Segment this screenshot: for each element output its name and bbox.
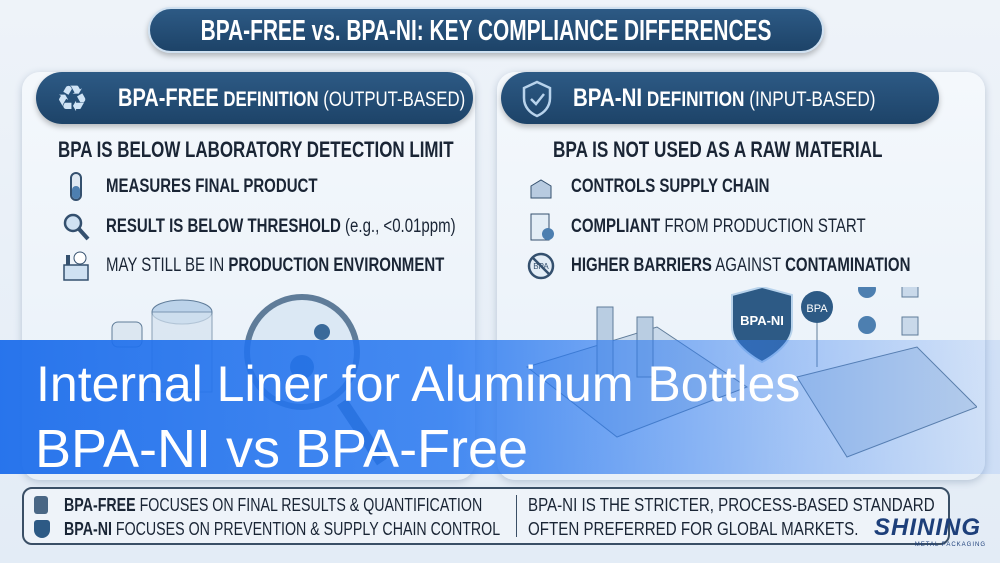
subheading: BPA IS BELOW LABORATORY DETECTION LIMIT [58,137,454,162]
panel: BPA-NI: BPA [533,262,549,271]
panel: BPA-NI: HIGHER BARRIERS AGAINST CONTAMINATION [571,255,910,276]
summary left: BPA-NI FOCUSES ON PREVENTION & SUPPLY CHAIN CONTROL [64,519,500,539]
list item 1 [70,172,318,201]
panel: BPA-NI [497,72,985,480]
list item 2 [530,214,866,240]
icon: recycle: ♻ [56,78,88,119]
panel: BPA-FREE: MAY STILL BE IN PRODUCTION ENVIRONMENT [106,255,444,276]
banner overlay [0,340,1000,474]
illustration: plant, shield, flow [526,287,977,458]
list item 2 [64,214,456,240]
illustration: plant, shield, flow: BPA [806,303,828,315]
banner title line 2: BPA-NI vs BPA-Free [35,419,528,479]
header: BPA-NI definition: BPA-NI DEFINITION (INPUT-BASED) [573,84,876,112]
illustration: plant, shield, flow: BPA-NI [740,313,784,328]
panel: BPA-FREE: MEASURES FINAL PRODUCT [106,176,318,197]
list item 3 [528,252,910,280]
illustration: lab containers and magnifier [112,294,387,466]
icon: shield check [522,80,552,118]
banner title line 1: Internal Liner for Aluminum Bottles [36,356,800,412]
list item 1 [530,176,769,198]
header: BPA-FREE definition: BPA-FREE DEFINITION (OUTPUT-BASED) [118,84,465,112]
panel: BPA-NI: COMPLIANT FROM PRODUCTION START [571,216,866,237]
header: BPA-FREE definition [36,72,473,124]
list item 3 [63,252,444,281]
summary left: BPA-FREE FOCUSES ON FINAL RESULTS & QUANTIFICATION [64,495,482,515]
summary left [34,495,500,539]
panel: BPA-FREE: RESULT IS BELOW THRESHOLD (e.g., <0.01ppm) [106,216,456,237]
summary right [528,495,935,539]
subheading: BPA IS NOT USED AS A RAW MATERIAL [553,137,883,162]
title [148,7,824,53]
summary right: BPA-NI IS THE STRICTER, PROCESS-BASED STANDARD [528,495,935,515]
header: BPA-NI definition [501,72,939,124]
logo: METAL PACKAGING [915,542,986,548]
summary box [22,487,950,545]
logo: SHINING [874,514,981,541]
title: BPA-FREE vs. BPA-NI: KEY COMPLIANCE DIFFERENCES [201,15,771,47]
summary right: OFTEN PREFERRED FOR GLOBAL MARKETS. [528,519,858,539]
panel: BPA-FREE [22,72,475,480]
panel: BPA-NI: CONTROLS SUPPLY CHAIN [571,176,769,197]
